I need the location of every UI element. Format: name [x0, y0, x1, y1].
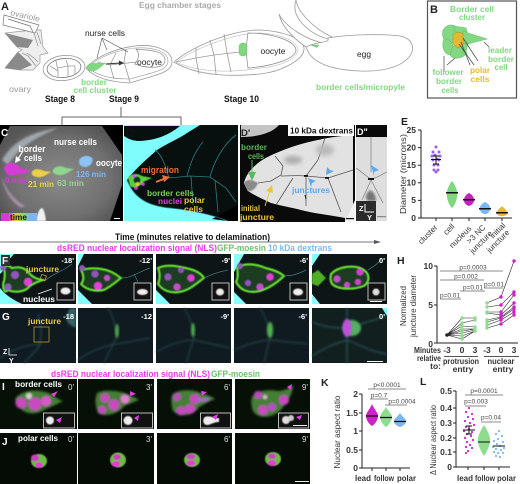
frame label: -9'	[221, 312, 229, 321]
labels	[5, 137, 122, 189]
frame label: 0'	[68, 383, 74, 392]
inset nucleus	[290, 283, 307, 300]
x category labels: cell	[442, 222, 457, 237]
leader border cell label: leader	[488, 45, 513, 55]
scale bar	[114, 218, 120, 219]
dextran label: 10 kDa dextrans	[290, 126, 353, 136]
channel legend for panels I and J: dsRED nuclear localization signal (NLS)	[51, 369, 210, 379]
frame label: 0'	[68, 435, 74, 444]
polar cells label	[470, 65, 491, 84]
panel letter C: C	[1, 128, 8, 139]
x-axis labels: Minutes	[414, 345, 441, 355]
labels: cells	[24, 153, 42, 163]
axes	[418, 130, 512, 221]
y tick labels: 15	[407, 160, 416, 170]
y tick labels	[407, 125, 416, 223]
significance brackets: p=0.7	[371, 392, 388, 400]
panel letter F	[1, 255, 10, 267]
y-axis title: Diameter (microns)	[398, 134, 408, 214]
inset nucleus	[212, 283, 229, 300]
x category labels: lead	[355, 473, 371, 483]
frame label: -18	[63, 312, 74, 321]
polar cells label: cells	[470, 74, 490, 84]
significance brackets: p=0.01	[440, 292, 460, 300]
initial juncture label and arrow	[239, 185, 274, 222]
frame -6	[234, 254, 309, 304]
labels: border cells	[147, 188, 194, 198]
x-axis labels: 0	[460, 345, 465, 355]
frame label: -6'	[299, 312, 307, 321]
x category labels: >3 NC	[465, 223, 488, 246]
labels: polar	[184, 195, 206, 205]
y tick labels: 1	[353, 426, 358, 436]
channel legend for panels I and J: GFP-moesin	[211, 369, 260, 379]
mean and error bars	[463, 426, 505, 446]
ZY orientation	[3, 348, 17, 365]
frame -12	[78, 254, 153, 304]
egg with dorsal appendages: border cells/micropyle	[316, 82, 405, 92]
axes	[453, 391, 510, 470]
labels: 126 min	[76, 169, 106, 179]
stage labels	[45, 94, 259, 104]
x category labels: juncture	[467, 229, 495, 256]
data points: lead	[463, 407, 475, 454]
frame 0	[312, 254, 387, 304]
panel B: border cell cluster: border	[488, 54, 515, 64]
x category labels: follow	[374, 473, 394, 483]
x-axis labels: nuclear	[488, 356, 515, 366]
significance brackets: p=0.002	[454, 274, 478, 280]
stage 9 egg chamber: border	[81, 78, 107, 87]
panel F: time-lapse of cluster	[0, 254, 387, 304]
data: initial juncture	[497, 206, 507, 216]
panel letter I: I	[2, 382, 5, 393]
x-axis labels: relative	[417, 353, 441, 363]
y tick labels: 0.2	[440, 433, 452, 443]
paired lines	[447, 261, 514, 339]
x-axis labels: -3	[483, 345, 491, 355]
y tick labels	[440, 386, 452, 472]
y tick labels	[424, 261, 433, 349]
panel A: egg chamber stages	[1, 0, 412, 125]
panel B: border cell cluster	[428, 1, 516, 98]
frame 0	[312, 308, 387, 363]
y tick labels: 10	[407, 178, 416, 188]
x category labels: juncture	[484, 228, 512, 255]
inset nucleus	[57, 283, 74, 300]
y tick labels: 0.5	[346, 445, 358, 455]
y tick labels: 5	[411, 195, 416, 205]
inset nucleus	[278, 413, 308, 428]
y-axis title: Δ Nuclear aspect ratio	[428, 405, 438, 475]
ZY orientation: Y	[9, 358, 14, 365]
y tick labels: 0.5	[440, 386, 452, 396]
x category labels: polar	[497, 473, 517, 483]
labels: oocyte	[96, 158, 122, 168]
data: cluster	[430, 146, 442, 174]
data points: lead	[366, 404, 378, 426]
frame 6	[157, 379, 232, 429]
x-axis labels: protrusion	[443, 356, 479, 366]
x category labels	[416, 221, 512, 256]
juncture annotation: juncture	[25, 264, 59, 274]
ovary drawing: ovariole	[10, 8, 41, 24]
channel legend for panels F and G: GFP-moesin	[217, 243, 266, 253]
axes	[434, 266, 518, 343]
y tick labels: 0	[411, 213, 416, 223]
paired points	[460, 301, 489, 341]
x category labels: nucleus	[448, 224, 473, 250]
frame label: 0'	[379, 256, 385, 265]
timeline heading with arrow	[0, 232, 381, 244]
y tick labels: 25	[407, 125, 416, 135]
timeline heading with arrow: Time (minutes relative to delamination)	[115, 232, 270, 242]
frame label: 9'	[302, 435, 308, 444]
significance brackets: p=0.0001	[470, 388, 498, 395]
x-axis labels: 3	[473, 345, 478, 355]
x category labels	[457, 473, 517, 483]
frame 9	[235, 379, 310, 429]
ovary drawing: ovary	[9, 85, 31, 94]
panel B: border cell cluster: cluster	[459, 12, 486, 22]
stage labels: Stage 8	[45, 94, 75, 104]
border cells label and arrow: cells	[248, 151, 264, 161]
y tick labels: 0.1	[440, 447, 452, 457]
x category labels: cluster	[416, 223, 440, 246]
egg with dorsal appendages	[279, 0, 412, 92]
follower border cells label	[432, 67, 464, 95]
frame 3	[78, 433, 154, 484]
frame label: -12'	[139, 256, 152, 265]
data points: follow	[478, 425, 490, 456]
y-axis title: juncture diameter	[408, 275, 418, 338]
stage 9 egg chamber: cell cluster	[74, 86, 116, 95]
border cells label and arrow: border	[241, 142, 268, 152]
panel C: time-lapse overlay	[0, 125, 123, 222]
x category labels: follow	[475, 473, 495, 483]
junctures label and arrowheads: junctures	[291, 185, 330, 195]
significance brackets: p<0.0001	[373, 382, 401, 389]
frame -18	[0, 308, 76, 365]
labels: nurse cells	[54, 137, 97, 147]
letter D double prime: D"	[357, 127, 368, 137]
x category labels: polar	[397, 473, 417, 483]
frame 9	[235, 433, 310, 484]
y tick labels: 0	[353, 463, 358, 473]
time colour bar: time	[10, 212, 27, 222]
stage 10 egg chamber	[174, 30, 304, 75]
labels: border	[18, 144, 46, 154]
labels	[141, 165, 206, 214]
stage 8 egg chamber	[42, 53, 86, 83]
y tick labels: 0	[447, 462, 452, 472]
frame label: -6'	[300, 256, 308, 265]
cell membranes	[127, 135, 236, 221]
significance brackets	[464, 388, 503, 422]
panel letter E: E	[401, 116, 408, 128]
y-axis title: Nuclear aspect ratio	[332, 395, 342, 468]
significance brackets: p=0.04	[481, 414, 501, 422]
arrow: border cell migration	[106, 63, 120, 64]
data: cell	[447, 181, 457, 208]
orientation ZY box: Z	[359, 204, 364, 213]
x category labels: initial	[488, 221, 508, 240]
follower border cells label: follower	[432, 67, 464, 77]
significance brackets: p=0.01	[463, 284, 483, 292]
panel G: orthogonal views	[0, 308, 387, 365]
panel I: border cells	[0, 379, 310, 429]
frame 6	[157, 433, 232, 484]
follower border cells label: border	[436, 76, 463, 86]
panel letter D prime: D'	[241, 128, 250, 139]
polar cells label: polar cells	[18, 433, 58, 443]
data: junctions over 3 nurse cells	[480, 202, 490, 214]
significance brackets: p=0.0004	[388, 398, 416, 406]
mean lines	[366, 416, 406, 422]
frame 0	[0, 433, 77, 484]
inset nucleus	[44, 413, 74, 428]
panel letter G: G	[2, 312, 10, 323]
polar cells label: polar	[470, 65, 491, 75]
stage 9 egg chamber	[74, 28, 172, 95]
panel letter K: K	[321, 377, 329, 389]
inset nucleus	[200, 413, 230, 428]
x-axis labels: entry	[493, 364, 514, 374]
panel H: normalized juncture diameter	[397, 255, 519, 374]
labels: 63 min	[57, 178, 84, 188]
x category labels	[355, 473, 417, 483]
data points: polar	[394, 413, 406, 427]
border cells label and arrow	[241, 142, 268, 181]
stage labels: Stage 10	[224, 94, 259, 104]
frame label: -18'	[61, 256, 74, 265]
panel letter L: L	[420, 376, 427, 388]
significance brackets: p=0.01	[484, 282, 504, 288]
panel letter B: B	[430, 4, 438, 16]
x category labels: lead	[457, 473, 473, 483]
frame label: -9'	[222, 256, 230, 265]
panel K: nuclear aspect ratio	[321, 377, 417, 483]
frame -9	[156, 254, 231, 304]
bracket from stage 9 to panels below	[62, 107, 181, 125]
y tick labels: 0	[428, 339, 433, 349]
panel D: dextran channel with cells	[124, 125, 238, 221]
heading: Border cell	[450, 4, 494, 14]
frame 0	[0, 379, 77, 429]
y tick labels: 10	[424, 261, 433, 271]
inset nucleus	[122, 413, 152, 428]
stage 9 egg chamber: nurse cells	[85, 28, 125, 38]
panel letter F: F	[2, 256, 8, 267]
ZY orientation: Z	[3, 349, 8, 356]
panel letter H: H	[397, 255, 405, 267]
frame label: -12	[141, 312, 152, 321]
x-axis labels: to:	[430, 361, 441, 371]
labels: cells	[184, 204, 203, 214]
orientation ZY box: Y	[367, 213, 372, 222]
data points: follow	[380, 407, 392, 427]
data: nucleus	[464, 193, 474, 206]
nucleus annotation: nucleus	[23, 294, 55, 304]
stage 9 egg chamber: oocyte	[137, 57, 162, 67]
frame label: 6'	[224, 435, 230, 444]
heading: egg chamber stages: Egg chamber stages	[139, 0, 221, 10]
initial juncture label and arrow: initial	[241, 203, 260, 213]
channel legend for panels F and G: 10 kDa dextrans	[268, 243, 332, 253]
ovary drawing	[3, 8, 48, 94]
cell callouts	[444, 38, 489, 72]
orientation ZY box	[356, 201, 376, 222]
frame -6	[234, 308, 309, 363]
x-axis labels: entry	[453, 364, 474, 374]
stage 10 egg chamber: oocyte	[260, 46, 286, 56]
x-axis labels: 0	[499, 345, 504, 355]
labels: 21 min	[28, 179, 54, 189]
y tick labels: 0.4	[440, 403, 452, 413]
significance brackets: p=0.003	[464, 398, 488, 406]
x-axis labels: -3	[443, 345, 451, 355]
migrating cluster positions	[4, 156, 93, 177]
y tick labels	[346, 389, 358, 473]
cluster illustration	[442, 25, 487, 58]
frame -18	[0, 254, 76, 304]
border cell cluster	[128, 174, 152, 190]
frame -12	[78, 308, 153, 363]
panel letter D: D	[126, 128, 133, 139]
labels: migration	[141, 165, 179, 176]
egg with dorsal appendages: egg	[357, 49, 371, 59]
border cells label: border cells	[15, 379, 62, 389]
y tick labels: 20	[407, 142, 416, 152]
panel D double prime: orthogonal view	[356, 125, 387, 222]
juncture box: juncture	[27, 316, 61, 326]
panel E: diameter chart	[398, 116, 512, 256]
y tick labels: 5	[428, 300, 433, 310]
x-axis labels	[414, 345, 519, 374]
y tick labels: 1.5	[346, 408, 358, 418]
follower border cells label: cells	[442, 85, 459, 95]
y tick labels: 0.3	[440, 418, 452, 428]
panel J: polar cells	[0, 433, 310, 484]
panel letter J: J	[2, 437, 8, 448]
axes	[359, 394, 410, 471]
frame label: 0'	[379, 312, 385, 321]
panel L: change in nuclear aspect ratio	[420, 376, 517, 483]
channel legend for panels F and G	[57, 243, 332, 253]
inset nucleus	[368, 283, 385, 300]
y-axis title	[398, 275, 418, 338]
frame -9	[156, 308, 231, 363]
frame label: 6'	[224, 383, 230, 392]
y tick labels: 2	[353, 389, 358, 399]
frame label: 3'	[146, 435, 152, 444]
significance brackets	[440, 264, 504, 300]
frame label: 9'	[302, 383, 308, 392]
initial juncture label and arrow: juncture	[239, 212, 274, 222]
channel legend for panels F and G: dsRED nuclear localization signal (NLS)	[57, 243, 217, 253]
y-axis title: Normalized	[398, 286, 408, 326]
labels: nuclei	[158, 196, 182, 206]
frame 3	[78, 379, 154, 429]
migration arrow	[156, 175, 170, 182]
stage labels: Stage 9	[109, 94, 139, 104]
frame label: 3'	[146, 383, 152, 392]
significance brackets	[368, 382, 416, 406]
x-axis labels: 3	[512, 345, 517, 355]
significance brackets: p=0.0003	[459, 264, 487, 272]
panel D prime: dextran grayscale	[239, 125, 355, 222]
labels: 0 min	[5, 175, 26, 185]
panel letter A: A	[1, 1, 9, 13]
panel B: border cell cluster: cell	[494, 62, 508, 72]
data points: polar	[492, 430, 505, 458]
inset nucleus	[134, 283, 151, 300]
